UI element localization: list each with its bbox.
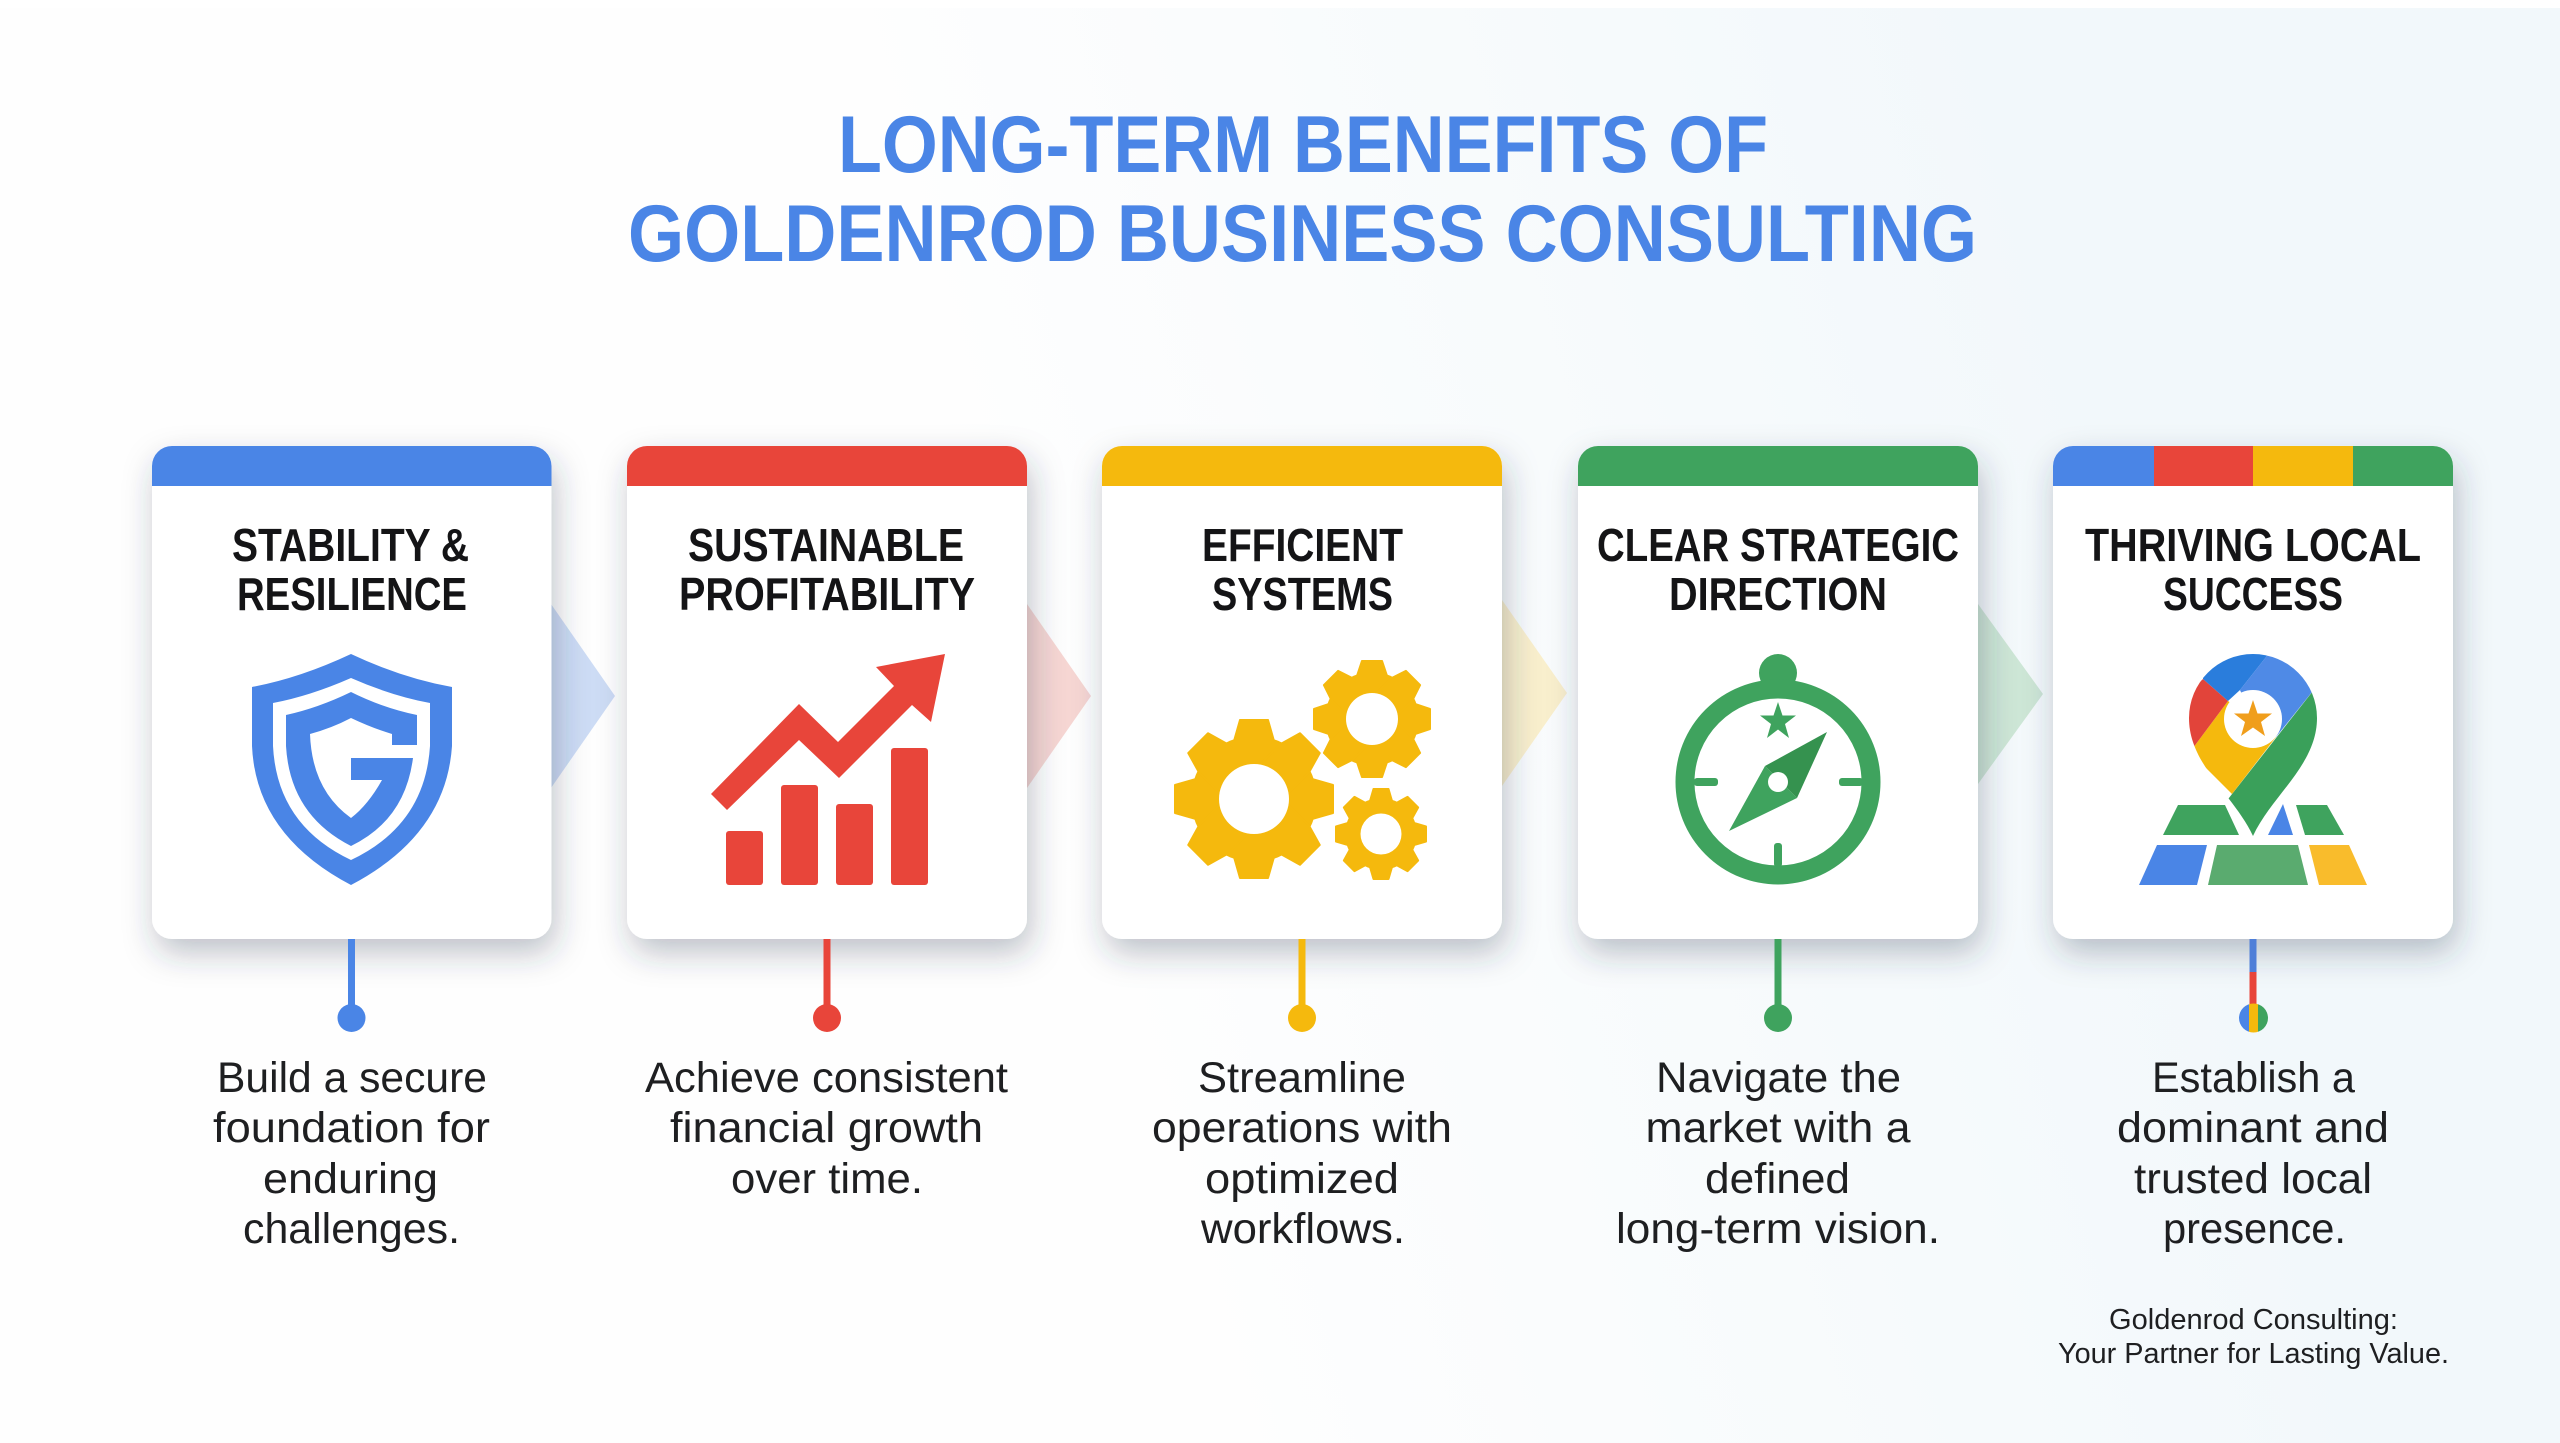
footer tagline <box>2058 1304 2449 1370</box>
heading: thriving local success: SUCCESS <box>2163 568 2343 620</box>
connector: green <box>1764 939 1792 1032</box>
title: LONG-TERM BENEFITS OF <box>838 100 1768 190</box>
arrow: red <box>1016 604 1091 788</box>
heading: efficient systems: EFFICIENT <box>1202 519 1403 571</box>
connector: blue <box>338 939 366 1032</box>
blue header bar <box>152 446 552 486</box>
text: direction description: market with a <box>1646 1104 1911 1152</box>
panel: thriving local success <box>2053 446 2453 939</box>
heading: clear strategic direction <box>1597 519 1959 620</box>
arrow: green <box>1967 604 2043 784</box>
text: local success description: dominant and <box>2117 1104 2389 1152</box>
title: GOLDENROD BUSINESS CONSULTING <box>628 189 1977 279</box>
panel: clear strategic direction <box>1578 446 1978 939</box>
text: profitability description: financial growth <box>670 1104 983 1152</box>
text: profitability description <box>645 1054 1008 1203</box>
connector: yellow <box>1288 939 1316 1032</box>
text: local success description <box>2117 1054 2389 1253</box>
heading: efficient systems <box>1202 519 1403 620</box>
text: local success description: presence. <box>2163 1205 2346 1253</box>
heading: clear strategic direction: CLEAR STRATEGIC <box>1597 519 1959 571</box>
yellow header bar <box>1102 446 1502 486</box>
text: systems description: Streamline <box>1198 1054 1406 1102</box>
heading: sustainable profitability: SUSTAINABLE <box>688 519 964 571</box>
four-colour header bar <box>2053 446 2453 486</box>
red header bar <box>627 446 1027 486</box>
heading: efficient systems: SYSTEMS <box>1212 568 1393 620</box>
footer tagline: Goldenrod Consulting: <box>2109 1304 2398 1336</box>
panel: stability and resilience <box>152 446 552 939</box>
text: systems description: operations with <box>1152 1104 1452 1152</box>
text: local success description: Establish a <box>2152 1054 2355 1102</box>
text: stability description: foundation for <box>213 1104 490 1152</box>
icon: shield with G <box>252 654 452 885</box>
text: stability description <box>213 1054 490 1253</box>
arrow: yellow <box>1491 600 1567 786</box>
text: stability description: Build a secure <box>217 1054 487 1102</box>
text: profitability description: Achieve consistent <box>645 1054 1008 1102</box>
icon: gears <box>1175 661 1430 879</box>
icon: map pin on map <box>2139 650 2367 885</box>
heading: thriving local success <box>2085 519 2421 620</box>
arrow: blue <box>540 604 615 788</box>
text: stability description: enduring <box>263 1155 438 1203</box>
title <box>628 100 1977 279</box>
heading: sustainable profitability: PROFITABILITY <box>679 568 975 620</box>
text: direction description: defined <box>1705 1155 1850 1203</box>
heading: stability and resilience: STABILITY & <box>232 519 469 571</box>
text: systems description: optimized <box>1205 1155 1399 1203</box>
panel: sustainable profitability <box>627 446 1027 939</box>
connector: red <box>813 939 841 1032</box>
text: local success description: trusted local <box>2134 1155 2372 1203</box>
connector: multicolour <box>2239 939 2268 1033</box>
heading: sustainable profitability <box>679 519 975 620</box>
icon: compass <box>1685 654 1871 875</box>
heading: clear strategic direction: DIRECTION <box>1669 568 1887 620</box>
text: direction description: Navigate the <box>1656 1054 1901 1102</box>
text: profitability description: over time. <box>731 1155 923 1203</box>
text: systems description: workflows. <box>1200 1205 1405 1253</box>
text: systems description <box>1152 1054 1452 1253</box>
text: stability description: challenges. <box>243 1205 460 1253</box>
heading: thriving local success: THRIVING LOCAL <box>2085 519 2421 571</box>
heading: stability and resilience: RESILIENCE <box>237 568 467 620</box>
footer tagline: Your Partner for Lasting Value. <box>2058 1338 2449 1370</box>
text: direction description <box>1616 1054 1940 1253</box>
icon: rising bar chart <box>711 654 945 885</box>
heading: stability and resilience <box>232 519 469 620</box>
panel: efficient systems <box>1102 446 1502 939</box>
text: direction description: long-term vision. <box>1616 1205 1940 1253</box>
green header bar <box>1578 446 1978 486</box>
